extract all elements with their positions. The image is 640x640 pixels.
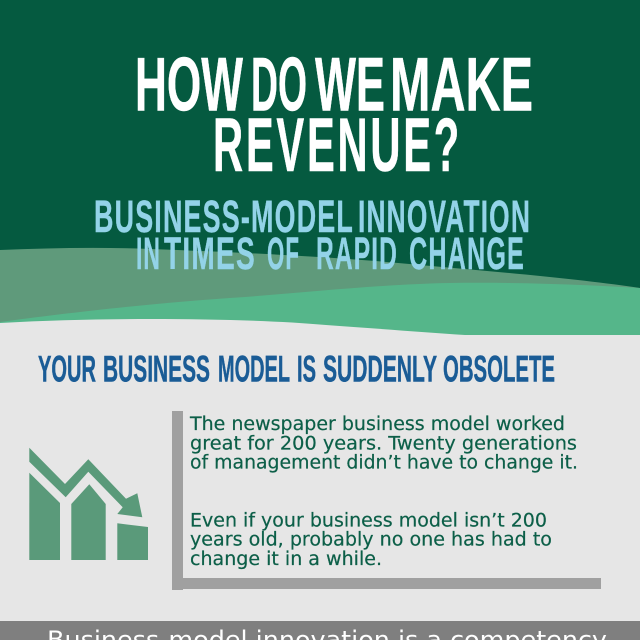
section heading: MODEL — [218, 348, 290, 390]
subtitle: RAPID — [316, 228, 398, 279]
section heading: IS — [297, 348, 316, 390]
paragraph 2: Even if your business model isn’t 200 — [190, 510, 547, 532]
paragraph 2: years old, probably no one has had to — [190, 530, 552, 550]
body text — [189, 414, 578, 570]
paragraph 1: of management didn’t have to change it. — [190, 452, 578, 474]
title: HOW — [135, 42, 243, 128]
bottom banner — [0, 621, 640, 640]
banner background — [0, 621, 640, 640]
icon: declining bar chart with arrow — [29, 448, 148, 560]
header panel — [0, 0, 640, 340]
title: WE — [315, 42, 385, 128]
subtitle: CHANGE — [409, 228, 525, 279]
section heading: YOUR — [38, 348, 96, 390]
bright green wave — [0, 283, 640, 340]
subtitle: BUSINESS-MODEL — [94, 191, 354, 242]
subtitle: OF — [267, 228, 300, 279]
section heading — [38, 348, 555, 390]
title — [135, 42, 533, 188]
subtitle: TIMES — [164, 228, 256, 279]
paragraph 2 — [190, 510, 552, 570]
paragraph 1: The newspaper business model worked — [189, 414, 565, 435]
title: DO — [251, 42, 307, 128]
subtitle — [94, 191, 531, 279]
dark green header background — [0, 0, 640, 340]
section heading: SUDDENLY — [323, 348, 437, 390]
paragraph 1 — [189, 414, 578, 474]
paragraph 2: change it in a while. — [190, 549, 382, 570]
light content panel — [0, 319, 640, 621]
subtitle: IN — [136, 228, 161, 279]
paragraph 1: great for 200 years. Twenty generations — [190, 434, 577, 454]
section heading: BUSINESS — [103, 348, 210, 390]
L-shaped bracket — [172, 411, 601, 590]
title: MAKE — [390, 42, 533, 128]
muted green wave — [0, 248, 640, 340]
